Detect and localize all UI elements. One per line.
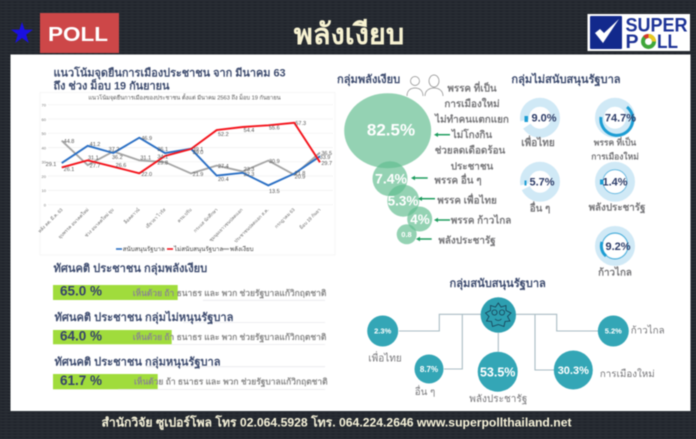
bubble values: 4% — [410, 212, 430, 227]
data labels: 27.4 — [218, 164, 229, 170]
bubble labels: พรรค อื่น ๆ — [434, 172, 482, 186]
data labels: 55.6 — [269, 126, 280, 132]
POLL badge — [40, 13, 119, 53]
donut: new-politics party 74.7%: พรรค ที่เป็น — [594, 136, 636, 148]
chart legend: พลังเงียบ — [230, 245, 254, 253]
donut: Pheu Thai 9.0%: เพื่อไทย — [521, 135, 555, 149]
attitude block: pro-government group — [53, 356, 328, 390]
chart heading — [53, 66, 286, 92]
support group bubbles — [367, 297, 665, 405]
white main panel — [10, 54, 690, 411]
Palang Pracharat bubble: 53.5% — [480, 366, 515, 380]
x axis labels — [36, 205, 322, 244]
connector lines — [399, 314, 598, 370]
line chart: 20 — [42, 174, 47, 179]
data labels: 29.1 — [46, 162, 56, 168]
icon: two people — [407, 75, 443, 96]
footer contact line: สำนักวิจัย ซูเปอร์โพล โทร 02.064.5928 โทร. 064.224.2646 www.superpollthailand.net — [101, 414, 572, 430]
attitude block: non-government-leaning group: เห็นด้วย ถ้า ธนาธร และ พวก ช่วยรัฐบาลแก้วิกฤตชาติ — [133, 331, 327, 343]
data labels: 37.2 — [109, 147, 119, 153]
donut: Move Forward 9.2% — [598, 230, 632, 278]
data labels: 21.8 — [295, 171, 305, 177]
Super Poll logo: P — [626, 32, 639, 53]
chart legend: สนับสนุนรัฐบาล — [123, 246, 165, 253]
green arrows — [411, 132, 450, 241]
Pheu Thai bubble — [367, 316, 402, 364]
attitude block: pro-government group: ทัศนคติ ประชาชน กลุ่มหนุนรัฐบาล — [54, 356, 221, 370]
x axis labels: ล็อคดาวน์ — [122, 205, 141, 225]
bubbles — [344, 93, 432, 244]
new-politics bubble: 30.3% — [558, 365, 589, 377]
data labels: 31.1 — [88, 156, 99, 162]
header star icon — [11, 22, 33, 43]
attitude block: non-government-leaning group — [53, 310, 327, 344]
bubble labels: ประชาชน — [451, 160, 494, 172]
bubble labels: พรรค ก้าวไกล — [451, 214, 511, 226]
attitude block: silent group: ทัศนคติ ประชาชน กลุ่มพลังเงียบ — [54, 262, 207, 276]
attitude block: silent group — [53, 262, 327, 300]
data labels: 20.9 — [295, 174, 305, 180]
new-politics bubble: การเมืองใหม่ — [600, 368, 655, 380]
line chart: 70 — [42, 102, 47, 108]
donut: Pheu Thai 9.0% — [521, 102, 557, 149]
data labels: 44.8 — [64, 139, 74, 145]
x axis labels: กรกฎาคม 63 — [274, 207, 296, 229]
support group heading: กลุ่มสนับสนุนรัฐบาล — [450, 277, 546, 291]
bubble labels: ช่วยลดเดือดร้อน — [435, 144, 506, 156]
donut: Pheu Thai 9.0%: 9.0% — [531, 112, 557, 124]
bubble labels — [434, 80, 511, 246]
attitude block: pro-government group: 61.7 % — [60, 373, 102, 388]
donut: new-politics party 74.7%: 74.7% — [605, 112, 636, 124]
x axis labels: ม็อบ 19 กันยา — [297, 205, 322, 230]
Super Poll logo: LL — [657, 32, 678, 53]
data labels: 21.9 — [193, 172, 203, 178]
donut: Move Forward 9.2%: ก้าวไกล — [598, 266, 632, 278]
Pheu Thai bubble: เพื่อไทย — [368, 350, 402, 364]
donut: others 5.7%: 5.7% — [529, 176, 555, 188]
data labels: 33.9 — [320, 155, 330, 161]
donut: others 5.7% — [524, 166, 556, 214]
bubble values: 82.5% — [367, 120, 415, 140]
data labels: 22.3 — [244, 172, 254, 178]
red series: oppose government — [62, 123, 320, 173]
central face icon — [481, 297, 516, 333]
bubble chart: silent group — [344, 80, 511, 246]
line chart: 10 — [42, 188, 47, 193]
attitude block: non-government-leaning group: 64.0 % — [60, 328, 102, 344]
chart legend — [116, 245, 254, 253]
data labels: 20.4 — [218, 177, 229, 183]
Move Forward bubble: ก้าวไกล — [631, 324, 665, 336]
bubble values: 5.3% — [388, 194, 418, 208]
bubble values: 7.4% — [375, 170, 408, 186]
donut: Move Forward 9.2%: 9.2% — [605, 241, 631, 253]
x axis labels: กระแส นักศึกษา — [192, 206, 219, 233]
chart heading: ถึง ช่วง ม็อบ 19 กันยายน — [53, 78, 170, 92]
chart heading: แนวโน้มจุดยืนการเมืองประชาชน จาก มีนาคม 63 — [54, 66, 286, 80]
blue series: support government — [62, 138, 320, 185]
data labels: 26.1 — [64, 167, 74, 173]
data labels: 22.0 — [141, 172, 152, 178]
x axis labels: ช่วง อนาคตใหม่ ยุบ — [84, 207, 115, 239]
Super Poll logo — [588, 14, 690, 53]
data labels: 30.9 — [269, 159, 280, 165]
data labels: 29.7 — [321, 161, 332, 167]
bubble values: 0.8 — [401, 230, 412, 239]
data labels: 23.3 — [244, 167, 254, 173]
data labels: 26.6 — [116, 163, 126, 169]
others bubble: 8.7% — [420, 365, 438, 374]
data labels: 13.5 — [269, 189, 280, 195]
data labels: 31.1 — [140, 156, 151, 162]
donut: Palang Pracharat 1.4%: 1.4% — [602, 176, 628, 188]
donut: Palang Pracharat 1.4%: พลังประชารัฐ — [589, 202, 646, 214]
Move Forward bubble — [598, 316, 665, 346]
Palang Pracharat bubble: พลังประชารัฐ — [469, 394, 527, 405]
donut: new-politics party 74.7% — [591, 102, 639, 162]
data labels: 54.4 — [244, 128, 254, 134]
non-support group heading: กลุ่มไม่สนับสนุนรัฐบาล — [511, 72, 621, 87]
data labels: 46.9 — [141, 136, 152, 142]
bubble labels: ไม่โกงกิน — [451, 128, 492, 141]
new-politics bubble — [554, 350, 655, 390]
chart title: แนวโน้มจุดยืนการเมืองของประชาชน ตั้งแต่ มีนาคม 2563 ถึง ม็อบ 19 กันยายน — [88, 93, 281, 102]
attitude block: silent group: เห็นด้วย ถ้า ธนาธร และ พวก ช่วยรัฐบาลแก้วิกฤตชาติ — [133, 287, 327, 299]
donut: others 5.7%: อื่น ๆ — [530, 200, 550, 214]
Move Forward bubble: 5.2% — [605, 327, 622, 336]
data labels: 57.3 — [295, 121, 306, 127]
line chart: 50 — [42, 131, 47, 136]
data labels: 29.8 — [157, 160, 168, 166]
bubble labels: พรรค เพื่อไทย — [437, 192, 497, 206]
x axis labels: ประชาชนปลดแอก ส.ค. — [233, 207, 270, 244]
x axis labels: ยุบพรรค อนาคตใหม่ — [57, 207, 90, 240]
attitude block: non-government-leaning group: ทัศนคติ ประชาชน กลุ่มไม่หนุนรัฐบาล — [54, 310, 234, 325]
data labels: 39.0 — [193, 150, 203, 156]
Palang Pracharat bubble — [469, 352, 527, 405]
line chart: 30 — [42, 160, 47, 165]
data labels: 27.7 — [90, 164, 100, 170]
data labels: 52.2 — [218, 132, 229, 138]
chart legend: ไม่สนับสนุนรัฐบาล — [173, 245, 223, 253]
gray series: silent group — [62, 141, 320, 175]
data labels: 39.1 — [193, 147, 203, 153]
x axis labels: ครม.ปรับ — [176, 206, 193, 224]
Super Poll logo: SUPER — [626, 16, 688, 36]
data labels — [46, 121, 332, 195]
others bubble: อื่น ๆ — [415, 385, 435, 398]
bubble values — [367, 120, 430, 239]
line chart: 60 — [42, 117, 47, 122]
data labels: 36.5 — [321, 151, 332, 157]
data labels: 41.2 — [90, 142, 100, 148]
x axis labels: หลัง ลต. มี.ค. 63 — [36, 206, 64, 234]
donut: Palang Pracharat 1.4% — [589, 166, 646, 214]
others bubble — [414, 354, 444, 398]
bubble labels: พลังประชารัฐ — [438, 234, 496, 246]
data labels: 36.1 — [157, 147, 168, 153]
data labels: 36.2 — [112, 155, 123, 161]
bubble labels: การเมืองใหม่ — [444, 97, 500, 110]
data labels: 34.1 — [157, 154, 168, 160]
bubble labels: ไม่ทำคนแตกแยก — [434, 112, 509, 126]
title: พลังเงียบ — [294, 19, 404, 51]
bubble labels: พรรค ที่เป็น — [447, 80, 497, 94]
line chart: 40 — [42, 145, 47, 150]
Pheu Thai bubble: 2.3% — [374, 327, 392, 336]
line chart — [36, 92, 335, 255]
x axis labels: เยียวยา ไวรัส — [144, 206, 167, 229]
x axis labels: ชุมนุมเยาวชนปลดแอก — [208, 207, 245, 243]
POLL badge: POLL — [48, 24, 108, 46]
donut: new-politics party 74.7%: การเมืองใหม่ — [591, 152, 639, 162]
attitude block: silent group: 65.0 % — [60, 284, 102, 298]
attitude block: pro-government group: เห็นด้วย ถ้า ธนาธร และ พวก ช่วยรัฐบาลแก้วิกฤตชาติ — [134, 376, 328, 388]
silent group heading: กลุ่มพลังเงียบ — [337, 73, 400, 87]
line chart: 0 — [44, 202, 47, 208]
